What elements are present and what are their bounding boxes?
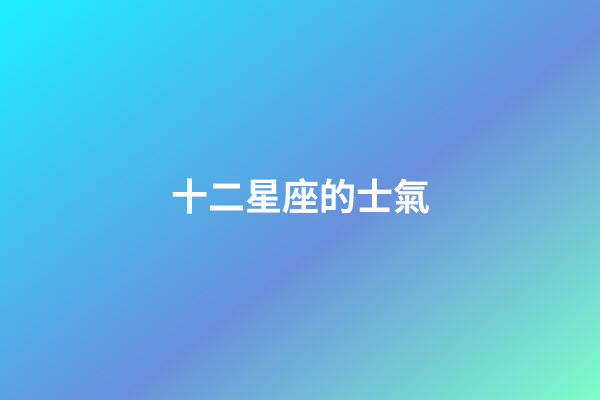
title: 十二星座的士氣 <box>171 177 430 218</box>
